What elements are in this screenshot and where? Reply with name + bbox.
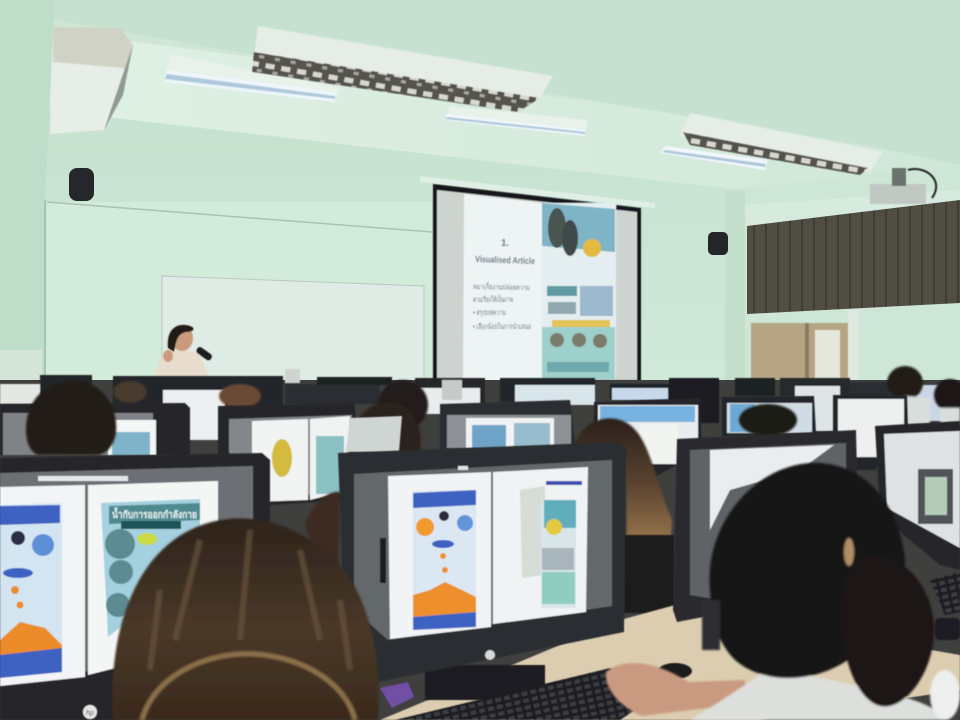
second row people	[26, 381, 797, 565]
person: head right	[739, 404, 797, 436]
front monitor: far right	[875, 421, 960, 570]
second row of monitors	[0, 395, 908, 505]
desk	[380, 605, 960, 720]
chair	[624, 535, 674, 613]
monitor: row 2 far left	[0, 403, 190, 455]
arm and hand	[606, 663, 745, 716]
screen infographic: water	[101, 499, 200, 637]
slide text: • เลือกน้อยในการนำเสนอ	[473, 322, 531, 331]
screen infographic: orange	[0, 503, 62, 678]
slide text: หมาเกี่ยงานปล่อยความ	[473, 281, 530, 292]
front student: right	[606, 463, 960, 720]
monitor: row 2 left centre	[218, 403, 358, 505]
person: hair centre	[348, 402, 421, 455]
mask edge	[702, 600, 720, 650]
speaker: left	[69, 168, 94, 201]
back row people	[113, 366, 960, 430]
front student: left hair	[112, 518, 379, 720]
person: hair behind laptop	[305, 492, 340, 565]
purple item on desk	[380, 682, 414, 708]
keyboards	[395, 572, 960, 720]
presenter	[155, 325, 213, 380]
lower room dark band	[0, 380, 960, 720]
person: long hair	[575, 418, 672, 552]
screen infographic: orange centre	[413, 490, 476, 630]
front monitor: centre	[338, 442, 626, 700]
speaker: right	[708, 232, 728, 255]
light: left	[165, 54, 340, 102]
light: right	[660, 113, 883, 175]
slide text	[473, 238, 535, 331]
monitor: row 2 centre	[440, 400, 576, 450]
light: centre large	[252, 26, 553, 112]
front monitor: left: hp	[86, 710, 94, 717]
person: dark hair left	[26, 381, 116, 455]
light: centre small	[445, 106, 588, 136]
ceiling lights	[165, 26, 883, 175]
air conditioner	[50, 27, 133, 134]
jacket	[690, 668, 945, 720]
door	[751, 310, 858, 385]
slide infographic	[542, 203, 616, 379]
screen infographic: teal centre	[541, 481, 582, 608]
laptop back	[346, 416, 402, 452]
slide text: ตามเรียงให้เป็นภาพ	[473, 294, 513, 304]
front monitor: right centre	[673, 430, 858, 622]
projector	[870, 168, 936, 204]
slide text: • สรุปบทความ	[473, 308, 506, 317]
screen infographic: water: น้ำกับการออกกำลังกาย	[112, 507, 197, 521]
hair	[710, 463, 905, 678]
projection screen	[433, 184, 641, 382]
slide text: Visualised Article	[475, 254, 535, 266]
monitor: row 2 centre right	[594, 398, 702, 480]
back row of monitors	[0, 369, 945, 440]
keyboard: right	[930, 572, 960, 615]
slide text: 1.	[501, 238, 510, 249]
front monitor: left	[0, 453, 270, 720]
whiteboard	[162, 276, 424, 382]
wall speakers	[69, 168, 728, 255]
curtain	[747, 200, 960, 314]
keyboard: centre	[395, 668, 650, 720]
monitor: row 2 far right	[833, 395, 908, 470]
monitor: row 2 right	[722, 396, 816, 436]
hair bun	[841, 556, 934, 707]
